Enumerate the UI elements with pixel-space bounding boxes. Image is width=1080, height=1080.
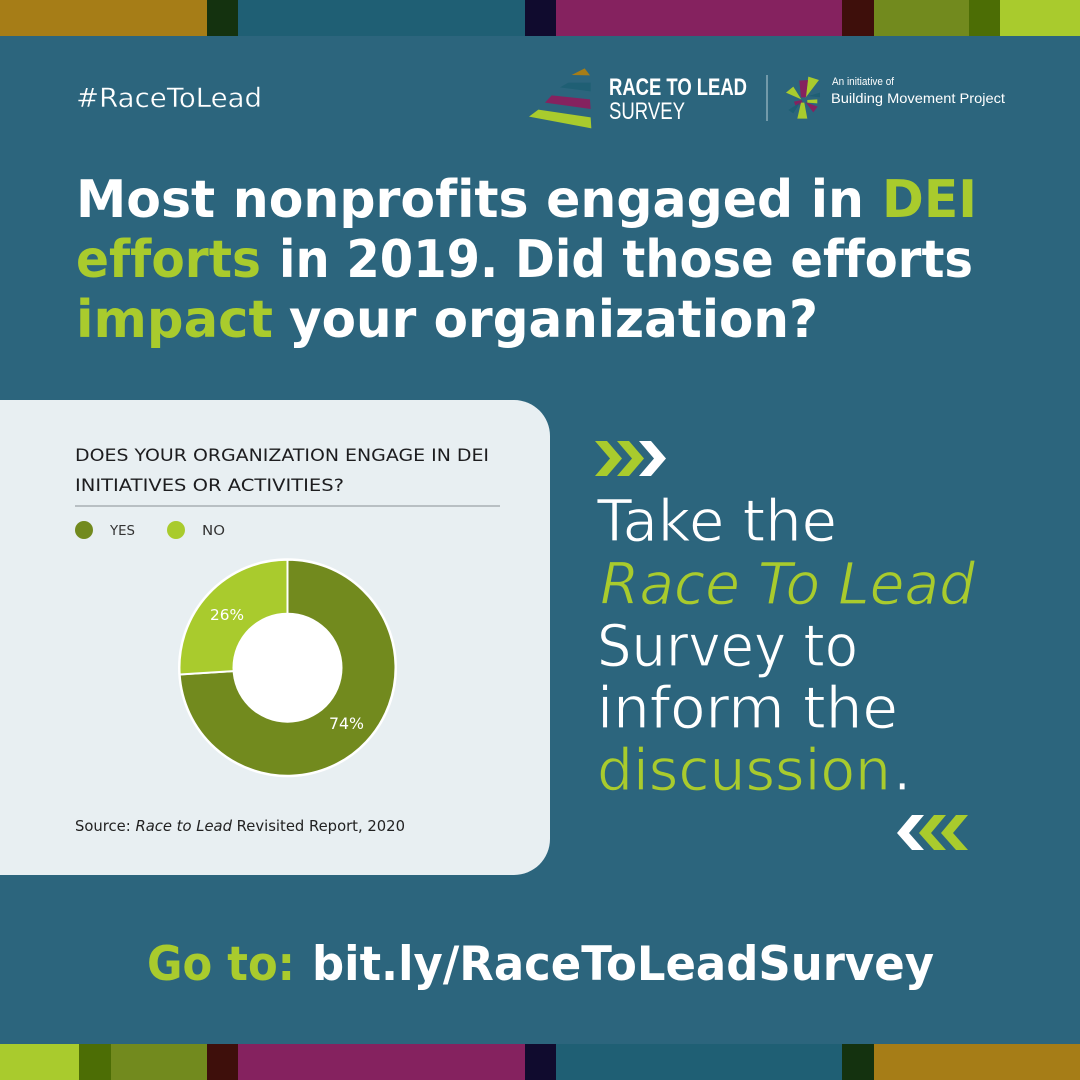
title: impact <box>76 290 273 350</box>
chart heading: INITIATIVES OR ACTIVITIES? <box>75 476 344 495</box>
call to action text <box>596 487 976 804</box>
icon: stacked pyramid <box>529 68 591 128</box>
top colour band <box>0 0 1080 36</box>
source note: Source: Race to Lead Revisited Report, 2020 <box>75 817 405 835</box>
legend: YES <box>109 523 135 539</box>
call to action text: Race To Lead <box>600 550 976 618</box>
hashtag: #RaceToLead <box>76 83 262 114</box>
logo text: Building Movement Project <box>831 90 1005 106</box>
donut chart <box>178 558 397 777</box>
logo wordmark: SURVEY <box>609 98 685 125</box>
panel: DEI chart <box>0 400 550 875</box>
title <box>76 170 977 350</box>
logo: Race to Lead Survey <box>529 68 747 128</box>
call to action text: Take the <box>596 487 837 555</box>
survey link: bit.ly/RaceToLeadSurvey <box>312 937 934 992</box>
call to action text: inform the <box>597 674 898 742</box>
icon: star burst <box>786 77 820 119</box>
title: efforts <box>76 230 261 290</box>
donut chart: 74% <box>329 714 364 733</box>
call to action text: . <box>893 736 911 804</box>
icon: left chevrons <box>897 815 968 850</box>
logo wordmark <box>609 74 747 125</box>
bottom colour band <box>0 1044 1080 1080</box>
title: DEI <box>882 170 977 230</box>
legend <box>75 521 225 539</box>
title: Most nonprofits engaged in <box>76 170 864 230</box>
chart heading: DOES YOUR ORGANIZATION ENGAGE IN DEI <box>75 446 489 465</box>
survey link: Go to: <box>147 937 295 992</box>
donut chart: 26% <box>210 606 244 624</box>
title: in 2019. Did those efforts <box>279 230 973 290</box>
logo wordmark: RACE TO LEAD <box>609 74 747 101</box>
logo: Building Movement Project <box>786 76 1005 119</box>
logo text <box>831 76 1005 106</box>
chart heading <box>75 446 489 495</box>
logo text: An initiative of <box>832 76 895 88</box>
call to action text: Survey to <box>597 612 858 680</box>
icon: right chevrons <box>595 441 666 476</box>
legend: NO <box>202 523 225 539</box>
title: your organization? <box>289 290 818 350</box>
call to action text: discussion <box>597 736 891 804</box>
